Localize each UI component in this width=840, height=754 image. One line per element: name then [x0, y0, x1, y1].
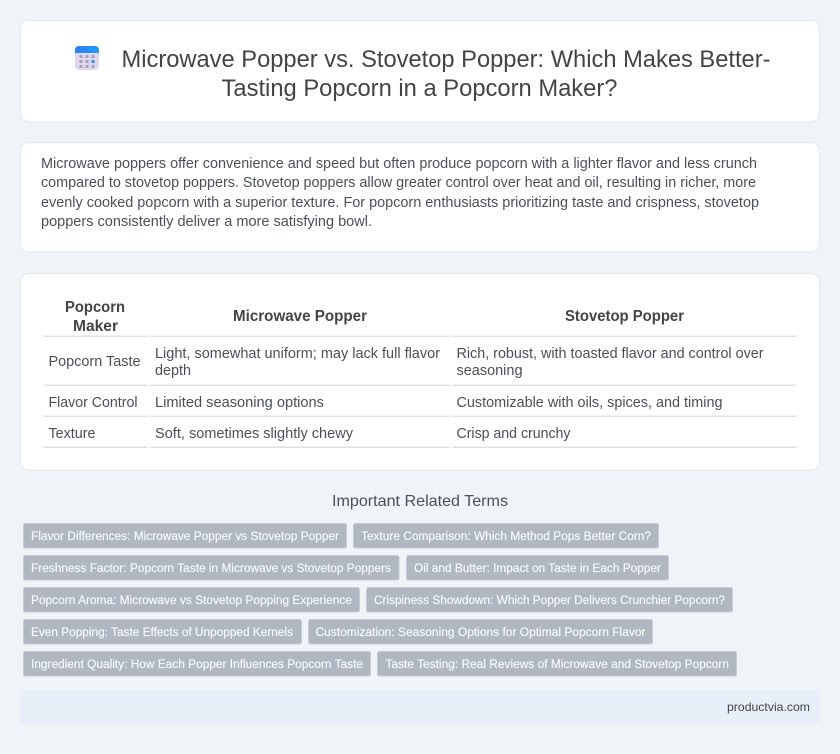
panel: comparison table [20, 274, 820, 470]
tags: related terms [24, 524, 736, 676]
tag [366, 588, 732, 612]
table row: popcorn taste: Rich, robust, with toasted flavor and control over [456, 346, 764, 362]
tag [24, 524, 346, 548]
tag [24, 588, 360, 612]
title [122, 46, 770, 102]
tag: Oil and Butter: Impact on Taste in Each Popper [414, 561, 661, 575]
text block: summary: evenly cooked popcorn with a superior texture. For popcorn enthusiasts prioritizing taste and crispness, stovetop [41, 195, 759, 211]
table row: texture: Soft, sometimes slightly chewy [155, 426, 354, 442]
table header: Popcorn [65, 299, 125, 316]
title: Tasting Popcorn in a Popcorn Maker? [222, 75, 618, 102]
table row: flavor control: Customizable with oils, spices, and timing [456, 395, 722, 411]
tag: Ingredient Quality: How Each Popper Influences Popcorn Taste [31, 657, 363, 671]
tag: Taste Testing: Real Reviews of Microwave and Stovetop Popcorn [386, 657, 729, 671]
tag: Flavor Differences: Microwave Popper vs Stovetop Popper [31, 529, 339, 543]
tag: Freshness Factor: Popcorn Taste in Microwave vs Stovetop Poppers [31, 561, 391, 575]
table row: popcorn taste: depth [155, 363, 191, 379]
tag: Crispiness Showdown: Which Popper Delivers Crunchier Popcorn? [374, 593, 725, 607]
table row: popcorn taste [48, 346, 764, 379]
title: Microwave Popper vs. Stovetop Popper: Which Makes Better- [122, 46, 770, 73]
table row: texture: Crisp and crunchy [456, 426, 571, 442]
tag [24, 620, 302, 644]
tag [24, 652, 370, 676]
table row: texture [48, 426, 571, 442]
heading: related terms: Important Related Terms [332, 493, 508, 510]
tag: Popcorn Aroma: Microwave vs Stovetop Popping Experience [31, 593, 352, 607]
table row: popcorn taste: seasoning [456, 363, 522, 379]
tag: Texture Comparison: Which Method Pops Better Corn? [361, 529, 651, 543]
tag [354, 524, 658, 548]
tag: Customization: Seasoning Options for Optimal Popcorn Flavor [316, 625, 646, 639]
tag [406, 556, 668, 580]
tag [378, 652, 736, 676]
table row: popcorn taste: Light, somewhat uniform; may lack full flavor [155, 346, 440, 362]
text block: summary: compared to stovetop poppers. Stovetop poppers allow greater control over heat and oil, resulting in richer, more [41, 175, 756, 191]
table row: texture: Texture [48, 426, 96, 442]
table header: Microwave Popper [233, 308, 367, 325]
text block: summary: poppers consistently deliver a more satisfying bowl. [41, 214, 372, 230]
footer [20, 690, 820, 724]
table row: popcorn taste: Popcorn Taste [48, 354, 140, 370]
tag [308, 620, 652, 644]
tag [24, 556, 399, 580]
text block: summary: Microwave poppers offer convenience and speed but often produce popcorn with a lighter flavor and less crunch [41, 156, 757, 172]
table row: flavor control: Flavor Control [48, 395, 138, 411]
table header: Maker [73, 318, 118, 335]
tag: Even Popping: Taste Effects of Unpopped Kernels [31, 625, 293, 639]
table header [65, 299, 684, 335]
table row: flavor control: Limited seasoning options [155, 395, 324, 411]
panel: title header [20, 20, 820, 122]
icon: calendar [75, 46, 99, 70]
panel: summary paragraph [20, 142, 820, 252]
footer source text: productvia.com [727, 700, 810, 714]
table row: flavor control [48, 395, 722, 411]
text block: summary [41, 156, 759, 230]
table header: Stovetop Popper [565, 308, 684, 325]
